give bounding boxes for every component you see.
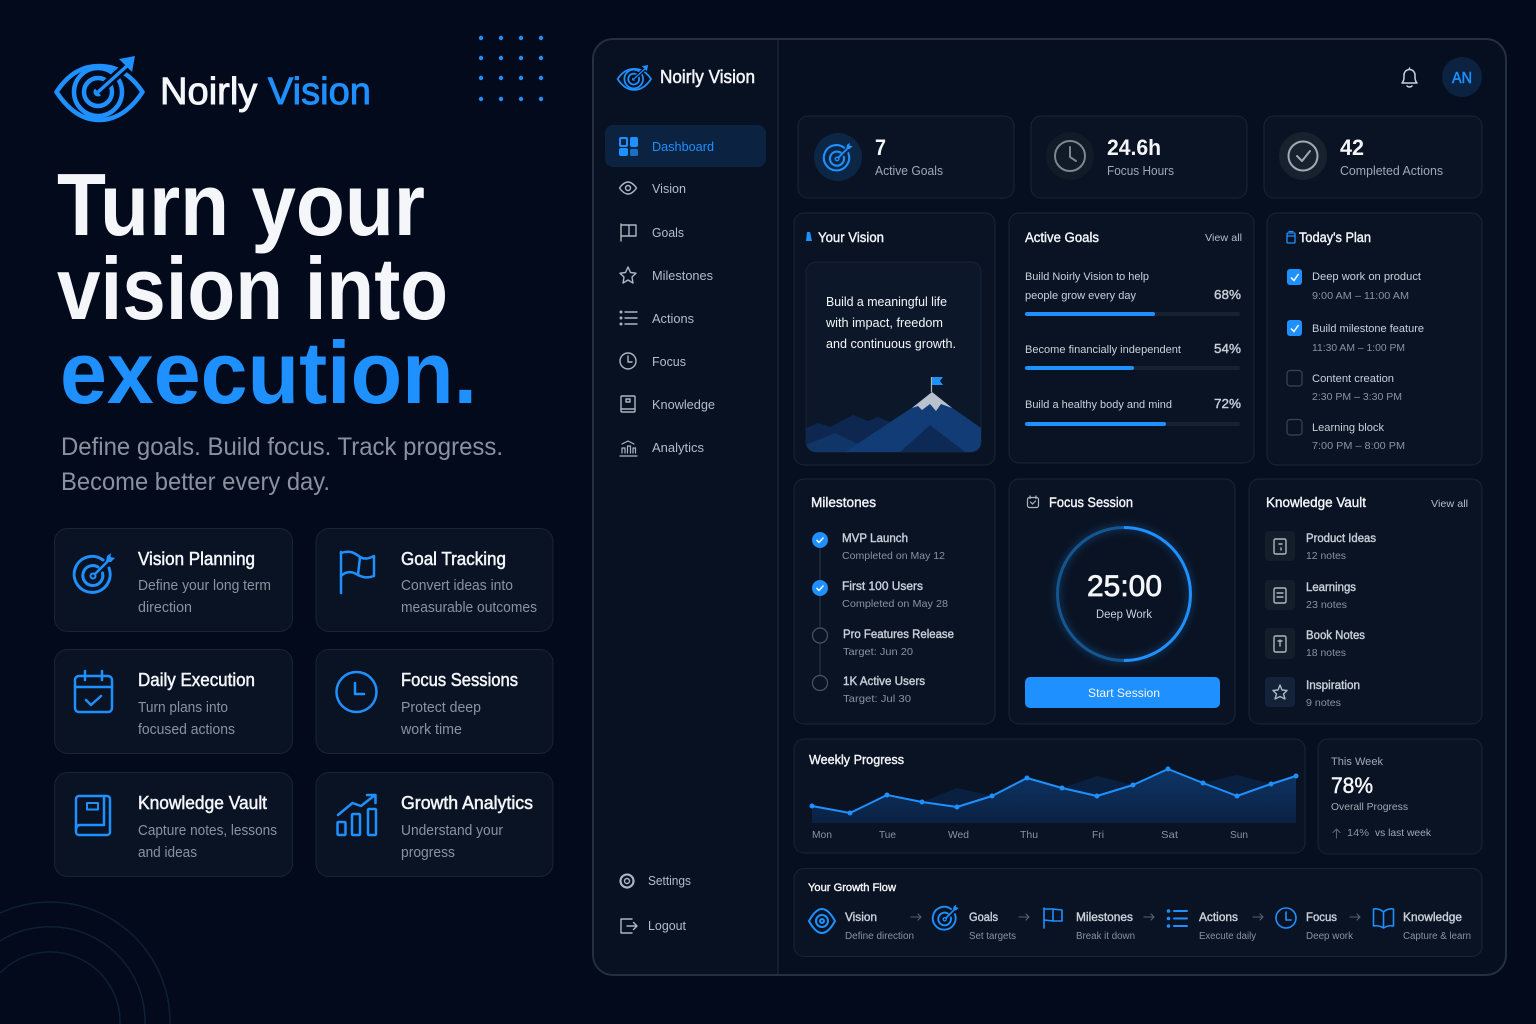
flow step: Knowledge	[1374, 909, 1471, 942]
milestone: MVP Launch: Completed on May 12	[842, 550, 945, 562]
feature card: Focus Sessions: Protect deep	[401, 700, 481, 716]
decorative concentric arcs	[0, 902, 170, 1024]
flow step: Goals: Goals	[969, 912, 998, 924]
milestone: MVP Launch	[812, 532, 945, 562]
nav item: Logout	[621, 919, 687, 933]
goal: healthy body and mind: 72%	[1214, 396, 1241, 411]
timer ring: Deep Work	[1096, 609, 1152, 621]
panel: This Week	[1318, 739, 1482, 854]
vault item: Inspiration: 9 notes	[1306, 697, 1341, 709]
feature card: Focus Sessions: Focus Sessions	[401, 670, 518, 690]
nav item: Analytics: Analytics	[652, 440, 704, 455]
panel: Your Growth Flow: Your Growth Flow	[808, 882, 896, 894]
feature card: Goal Tracking: measurable outcomes	[401, 600, 537, 616]
goal: financially independent: Become financially independent	[1025, 344, 1181, 356]
panel: Knowledge Vault: View all	[1431, 498, 1468, 510]
icon: target	[824, 143, 853, 170]
nav item: Settings	[620, 874, 691, 888]
feature card: Goal Tracking: Goal Tracking	[401, 549, 506, 569]
flow step: Vision: Vision	[845, 912, 877, 924]
timer ring: 25:00	[1087, 570, 1162, 603]
task: Build milestone: Build milestone feature	[1312, 323, 1424, 335]
feature card: Knowledge Vault: Capture notes, lessons	[138, 823, 277, 839]
vision statement card: with impact, freedom	[825, 315, 943, 330]
task: Deep work: 9:00 AM – 11:00 AM	[1312, 290, 1409, 302]
nav item: Dashboard (active)	[605, 125, 766, 167]
flow step: Actions	[1168, 910, 1256, 942]
feature card: Knowledge Vault	[54, 772, 292, 876]
milestone: First 100 Users: First 100 Users	[842, 581, 923, 593]
headline	[57, 155, 477, 422]
task: Deep work: Deep work on product	[1312, 271, 1421, 283]
flow step: Actions: Execute daily	[1199, 931, 1256, 942]
feature card: Growth Analytics: Understand your	[401, 823, 503, 839]
icon: clock	[336, 672, 376, 712]
chart axis labels: Mon	[812, 829, 832, 841]
vision statement card: and continuous growth.	[826, 336, 956, 351]
icon: check circle	[1288, 142, 1318, 170]
nav item: Focus	[620, 353, 686, 369]
stat card: Focus Hours: 24.6h	[1107, 135, 1161, 160]
arrow	[1019, 914, 1029, 920]
panel: This Week: 14%	[1347, 827, 1369, 839]
panel: Your Growth Flow	[794, 868, 1482, 956]
goal: financially independent: 54%	[1214, 341, 1241, 356]
feature card: Vision Planning	[54, 528, 292, 632]
nav item: Knowledge: Knowledge	[652, 397, 715, 412]
nav item: Settings: Settings	[648, 874, 691, 888]
feature card: Goal Tracking: Convert ideas into	[401, 578, 513, 594]
icon: clock	[1055, 141, 1085, 171]
stat card: Active Goals	[798, 116, 1014, 198]
subtitle: Define goals. Build focus. Track progress.	[61, 433, 503, 461]
vault item: Product Ideas: 12 notes	[1306, 550, 1346, 562]
line chart	[810, 766, 1298, 823]
feature card: Vision Planning: Define your long term	[138, 578, 271, 594]
sidebar logo	[618, 65, 755, 90]
flow step: Goals: Set targets	[969, 931, 1016, 942]
arrow	[1350, 914, 1360, 920]
goal: Build Noirly Vision: people grow every day	[1025, 290, 1136, 302]
avatar	[1442, 57, 1482, 97]
arrow	[1144, 914, 1154, 920]
stat card: Completed Actions: 42	[1340, 135, 1364, 160]
vault item: Learnings: 23 notes	[1306, 599, 1347, 611]
nav item: Goals: Goals	[652, 225, 684, 240]
nav item: Knowledge	[621, 396, 715, 412]
panel: Focus Session	[1009, 479, 1235, 724]
brand logo	[56, 56, 371, 120]
feature card: Growth Analytics	[316, 772, 553, 876]
feature card: Daily Execution: focused actions	[138, 722, 235, 738]
flow step: Vision: Define direction	[845, 931, 914, 942]
flow step: Focus	[1276, 908, 1354, 942]
panel: This Week: Overall Progress	[1331, 801, 1408, 813]
vault item: Book Notes: 18 notes	[1306, 647, 1346, 659]
vault item: Inspiration: Inspiration	[1306, 680, 1360, 692]
icon: up arrow	[1333, 829, 1340, 838]
panel: This Week: vs last week	[1375, 827, 1432, 839]
panel: Your Vision	[794, 213, 995, 465]
icon: vision marker	[806, 232, 812, 241]
vault item: Inspiration	[1265, 677, 1360, 709]
icon: eye target logo	[56, 56, 142, 120]
goal: Build Noirly Vision	[1025, 271, 1241, 316]
task: Deep work	[1287, 269, 1421, 302]
goal: financially independent	[1025, 341, 1241, 370]
app window	[593, 39, 1506, 975]
flow step: Focus: Deep work	[1306, 931, 1354, 942]
chart axis labels: Fri	[1092, 829, 1104, 841]
vault item: Product Ideas	[1265, 531, 1376, 562]
arrow	[911, 914, 921, 920]
brand name: Noirly Vision	[160, 71, 371, 113]
vault item: Product Ideas: Product Ideas	[1306, 533, 1376, 545]
feature card: Knowledge Vault: and ideas	[138, 845, 197, 861]
icon: target	[74, 553, 115, 592]
flow step: Milestones	[1044, 908, 1135, 942]
chart axis labels: Tue	[879, 829, 896, 841]
flow step: Actions: Actions	[1199, 912, 1238, 924]
nav item: Logout: Logout	[648, 919, 687, 933]
headline: execution.	[60, 323, 477, 422]
milestone: Pro Features Release: Target: Jun 20	[843, 646, 913, 658]
milestone: 1K Active Users: 1K Active Users	[843, 676, 925, 688]
stat card: Completed Actions	[1264, 116, 1482, 198]
nav item: Vision	[620, 181, 686, 196]
chart axis labels	[812, 829, 1248, 841]
nav item: Focus: Focus	[652, 354, 686, 369]
stat card: Active Goals: 7	[875, 135, 886, 160]
flow step: Knowledge: Capture & learn	[1403, 931, 1471, 942]
flow step: Milestones: Break it down	[1076, 931, 1135, 942]
panel: Focus Session: Focus Session	[1049, 495, 1133, 510]
panel: Milestones: Milestones	[811, 495, 876, 510]
arrow	[1253, 914, 1263, 920]
milestone: 1K Active Users	[812, 676, 925, 705]
flow step: Goals	[933, 905, 1016, 942]
chart axis labels: Sun	[1230, 829, 1248, 841]
headline: vision into	[57, 239, 448, 338]
decorative dot grid	[479, 36, 543, 101]
task: Learning block	[1287, 420, 1405, 452]
nav item: Analytics	[620, 440, 704, 456]
panel: This Week: 78%	[1331, 773, 1373, 798]
sidebar logo: Noirly Vision	[660, 67, 755, 87]
task: Build milestone: 11:30 AM – 1:00 PM	[1312, 342, 1405, 354]
panel: Active Goals: Active Goals	[1025, 230, 1099, 245]
feature card: Vision Planning: direction	[138, 600, 192, 616]
stat card: Focus Hours	[1031, 116, 1247, 198]
nav item: Actions	[620, 311, 694, 326]
flow step: Knowledge: Knowledge	[1403, 912, 1462, 924]
illustration: mountain with flag	[806, 377, 981, 452]
panel: Weekly Progress: Weekly Progress	[809, 752, 904, 767]
nav item: Actions: Actions	[652, 311, 694, 326]
nav item: Milestones	[620, 267, 713, 283]
feature card: Focus Sessions	[316, 650, 553, 754]
panel: Active Goals: View all	[1205, 232, 1242, 244]
panel: Weekly Progress	[794, 739, 1305, 853]
panel: Knowledge Vault: Knowledge Vault	[1266, 495, 1366, 510]
feature card: Daily Execution: Daily Execution	[138, 670, 255, 690]
vault item: Book Notes: Book Notes	[1306, 630, 1365, 642]
flow step: Vision	[809, 909, 914, 942]
icon: focus calendar	[1028, 496, 1038, 508]
nav item: Milestones: Milestones	[652, 268, 713, 283]
stat card: Active Goals: Active Goals	[875, 164, 943, 178]
milestone: First 100 Users: Completed on May 28	[842, 598, 948, 610]
feature card: Goal Tracking	[316, 528, 553, 632]
nav item: Vision: Vision	[652, 181, 686, 196]
feature card: Growth Analytics: progress	[401, 845, 455, 861]
task: Learning block: Learning block	[1312, 422, 1384, 434]
button: Start Session: Start Session	[1088, 686, 1160, 700]
feature card: Growth Analytics: Growth Analytics	[401, 793, 533, 813]
icon: calendar	[75, 671, 112, 712]
icon: growth chart	[338, 795, 376, 835]
icon: flag	[341, 552, 374, 593]
avatar: AN	[1452, 70, 1472, 87]
timer ring	[1058, 528, 1190, 660]
feature card: Daily Execution	[54, 650, 292, 754]
milestone: First 100 Users	[812, 580, 948, 610]
goal: Build Noirly Vision: Build Noirly Vision to help	[1025, 271, 1149, 283]
milestone: Pro Features Release	[812, 628, 954, 658]
chart axis labels: Wed	[948, 829, 969, 841]
panel: Knowledge Vault	[1249, 479, 1482, 724]
milestone: 1K Active Users: Target: Jul 30	[843, 693, 911, 705]
task: Content creation	[1287, 370, 1402, 403]
icon: book	[76, 796, 110, 835]
nav item: Dashboard (active): Dashboard	[652, 139, 714, 154]
panel: Today's Plan: Today's Plan	[1299, 230, 1371, 245]
panel: Today's Plan	[1267, 213, 1482, 465]
sidebar	[594, 40, 778, 974]
subtitle	[61, 433, 503, 496]
goal: Build Noirly Vision: 68%	[1214, 287, 1241, 302]
milestone: Pro Features Release: Pro Features Release	[843, 629, 954, 641]
vision statement card	[806, 262, 981, 452]
task: Content creation: Content creation	[1312, 373, 1394, 385]
vault item: Learnings	[1265, 580, 1356, 611]
task: Learning block: 7:00 PM – 8:00 PM	[1312, 440, 1405, 452]
feature card: Focus Sessions: work time	[400, 722, 462, 738]
vault item: Book Notes	[1265, 628, 1365, 659]
panel: Active Goals	[1009, 213, 1254, 463]
chart axis labels: Sat	[1161, 829, 1178, 841]
goal: healthy body and mind: Build a healthy body and mind	[1025, 399, 1172, 411]
milestone: MVP Launch: MVP Launch	[842, 533, 908, 545]
task: Build milestone	[1287, 320, 1424, 354]
icon: plan clipboard	[1287, 232, 1295, 243]
stat card: Focus Hours: Focus Hours	[1107, 164, 1174, 178]
goal: healthy body and mind	[1025, 396, 1241, 426]
chart axis labels: Thu	[1020, 829, 1038, 841]
nav item: Goals	[621, 224, 684, 241]
panel: Your Vision: Your Vision	[818, 230, 884, 245]
headline: Turn your	[57, 155, 425, 254]
button: Start Session	[1025, 677, 1220, 708]
vision statement card: Build a meaningful life	[826, 294, 947, 309]
feature card: Vision Planning: Vision Planning	[138, 549, 255, 569]
icon: notification bell	[1402, 68, 1417, 87]
feature card: Daily Execution: Turn plans into	[138, 700, 228, 716]
task: Content creation: 2:30 PM – 3:30 PM	[1312, 391, 1402, 403]
panel: This Week: This Week	[1331, 756, 1383, 768]
flow step: Milestones: Milestones	[1076, 912, 1133, 924]
feature card: Knowledge Vault: Knowledge Vault	[138, 793, 267, 813]
vault item: Learnings: Learnings	[1306, 582, 1356, 594]
subtitle: Become better every day.	[61, 468, 330, 496]
stat card: Completed Actions: Completed Actions	[1340, 164, 1443, 178]
flow step: Focus: Focus	[1306, 912, 1337, 924]
panel: Milestones	[794, 479, 995, 724]
